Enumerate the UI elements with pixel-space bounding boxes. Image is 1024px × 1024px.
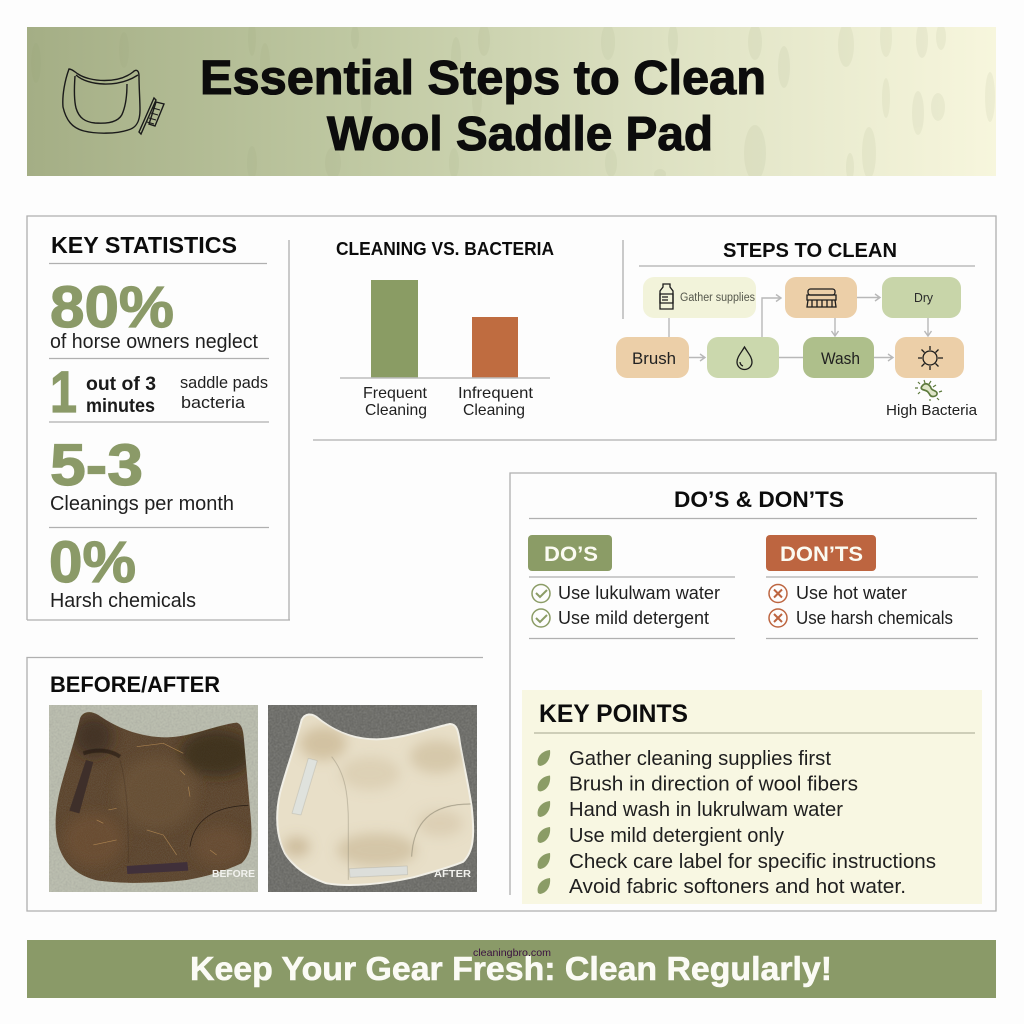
stat: 80%: 80%	[50, 275, 174, 340]
step: sun	[895, 337, 964, 378]
step: water drop	[707, 337, 779, 378]
photo label: before: BEFORE	[212, 868, 255, 880]
bullet leaves	[538, 750, 550, 894]
list: donts	[769, 583, 953, 628]
icon: bacteria	[915, 380, 942, 401]
list: dos: Use mild detergent	[558, 608, 709, 628]
step: gather supplies: Gather supplies	[680, 292, 755, 304]
stat: 0%: Harsh chemicals	[50, 590, 196, 612]
label: high bacteria: High Bacteria	[886, 402, 978, 419]
step: dry label	[882, 277, 961, 318]
title	[200, 52, 766, 161]
header banner	[27, 17, 996, 181]
stat: 0%	[49, 530, 196, 612]
heading: key points: KEY POINTS	[539, 700, 688, 728]
chart title: CLEANING VS. BACTERIA	[336, 239, 554, 259]
title: Wool Saddle Pad	[327, 108, 713, 161]
key points list	[569, 748, 936, 898]
badge: donts: DON’TS	[780, 543, 863, 566]
panel: before and after	[49, 672, 477, 892]
stat: 1 out of 3: saddle pads	[180, 373, 268, 392]
title: Essential Steps to Clean	[200, 52, 766, 105]
icon: saddle pad and brush	[63, 69, 164, 134]
stat: 80%	[50, 275, 258, 353]
stat: 1 out of 3	[50, 360, 268, 425]
heading: before after: BEFORE/AFTER	[50, 672, 220, 697]
stat: 1 out of 3: 1	[50, 360, 77, 425]
panel outline: top row	[27, 216, 996, 620]
key points list: Brush in direction of wool fibers	[569, 774, 858, 796]
photo: before	[49, 705, 258, 892]
panel: dos and donts	[528, 487, 978, 638]
bar label: infrequent: Infrequent	[458, 385, 534, 402]
badge: dos: DO’S	[544, 543, 598, 566]
step: wash	[803, 337, 874, 378]
list: donts: Use harsh chemicals	[796, 608, 953, 628]
header leaf pattern	[670, 27, 995, 176]
list: donts: Use hot water	[796, 583, 907, 603]
photo: after	[268, 705, 477, 892]
connector arrows	[669, 294, 932, 361]
footer slogan: Keep Your Gear Fresh: Clean Regularly!	[190, 950, 832, 987]
footer banner	[27, 940, 996, 998]
key points list: Use mild detergient only	[569, 825, 784, 847]
bar label: frequent	[363, 385, 428, 419]
badge: donts	[766, 535, 876, 571]
step: dry label: Dry	[914, 290, 933, 305]
heading: key statistics: KEY STATISTICS	[51, 232, 237, 258]
stat: 1 out of 3: minutes	[86, 396, 155, 417]
bar label: frequent: Cleaning	[365, 402, 427, 419]
step: brush label	[616, 337, 689, 378]
stat: 5-3: Cleanings per month	[50, 493, 234, 515]
bar label: infrequent: Cleaning	[463, 402, 525, 419]
photo label: after: AFTER	[434, 868, 471, 880]
stat: 1 out of 3: out of 3	[86, 374, 156, 395]
stat: 80%: of horse owners neglect	[50, 331, 258, 353]
key points list: Hand wash in lukrulwam water	[569, 799, 843, 821]
bar: frequent cleaning	[371, 280, 418, 378]
panel outline: lower row	[27, 473, 996, 911]
key points list: Avoid fabric softoners and hot water.	[569, 876, 906, 898]
watermark url: cleaningbro.com	[473, 947, 551, 959]
list: dos: Use lukulwam water	[558, 583, 720, 603]
bar: infrequent cleaning	[472, 317, 518, 378]
stat: 0%: 0%	[49, 530, 136, 595]
list: dos	[532, 583, 720, 628]
step: gather supplies	[643, 277, 756, 318]
bar chart: cleaning vs bacteria	[336, 239, 554, 419]
stat: 5-3: 5-3	[50, 433, 143, 498]
step: brush icon	[785, 277, 857, 318]
stat: 5-3	[50, 433, 234, 515]
panel: key statistics	[49, 232, 269, 612]
bar label: infrequent	[458, 385, 534, 419]
stat: 1 out of 3: bacteria	[181, 393, 246, 412]
key points list: Check care label for specific instructions	[569, 851, 936, 873]
heading: steps to clean: STEPS TO CLEAN	[723, 240, 897, 262]
panel: key points	[522, 690, 982, 904]
badge: dos	[528, 535, 612, 571]
flowchart: steps to clean	[616, 240, 978, 419]
step: wash: Wash	[821, 350, 860, 368]
bar label: frequent: Frequent	[363, 385, 428, 402]
key points list: Gather cleaning supplies first	[569, 748, 831, 770]
step: brush label: Brush	[632, 349, 676, 368]
heading: dos and donts: DO’S & DON’TS	[674, 487, 844, 512]
